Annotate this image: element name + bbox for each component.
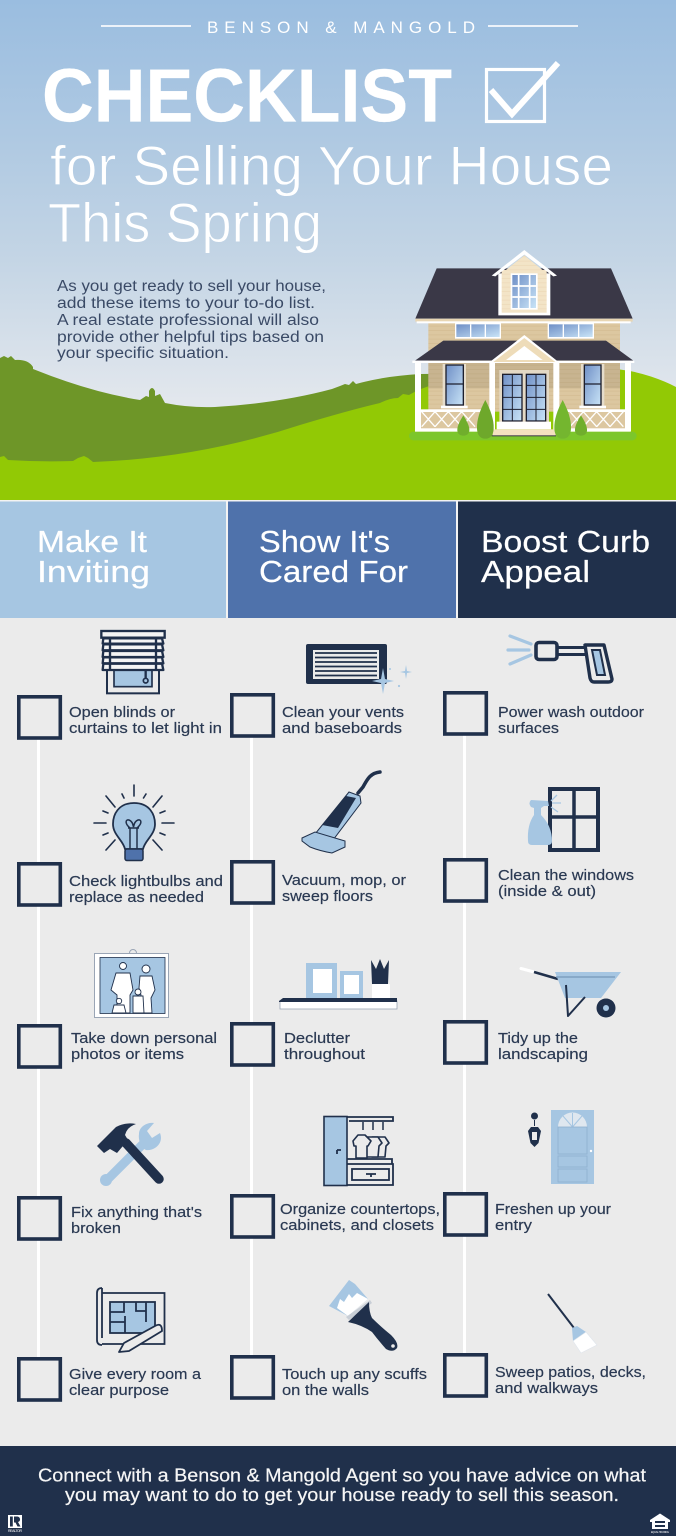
item: open blinds: Open blinds or	[69, 704, 175, 721]
heading: boost curb appeal: Boost Curb	[481, 524, 650, 559]
icon: shelf with frames	[279, 959, 397, 1009]
icon: closet	[324, 1116, 393, 1186]
item: vacuum: sweep floors	[282, 888, 373, 905]
logo line: BENSON & MANGOLD	[207, 18, 475, 37]
item: entry: entry	[495, 1217, 533, 1234]
intro paragraph: add these items to your to-do list.	[57, 295, 315, 312]
subtitle: This Spring	[48, 191, 322, 254]
item: open blinds	[19, 631, 222, 738]
icon: family photo	[94, 950, 168, 1018]
item: power wash: Power wash outdoor	[498, 704, 644, 721]
item: touch up walls: on the walls	[282, 1382, 369, 1399]
item: declutter: throughout	[284, 1046, 366, 1063]
icon: blinds	[101, 631, 165, 693]
heading: show it's cared for: Cared For	[259, 554, 408, 589]
panel: checklist body	[0, 618, 676, 1446]
item: room purpose	[19, 1288, 202, 1400]
intro paragraph: A real estate professional will also	[57, 312, 319, 329]
subtitle	[48, 134, 613, 254]
heading: show it's cared for: Show It's	[259, 524, 390, 559]
intro paragraph: your specific situation.	[57, 345, 229, 362]
subtitle: for Selling Your House	[50, 134, 613, 197]
item: organize	[232, 1116, 440, 1237]
item: landscaping: Tidy up the	[498, 1030, 578, 1047]
panel: footer	[0, 1446, 676, 1536]
item: organize: cabinets, and closets	[280, 1217, 434, 1234]
heading: make it inviting: Make It	[37, 524, 147, 559]
icon: pressure washer	[508, 636, 612, 682]
item: clean vents	[232, 644, 412, 737]
item: clean vents: Clean your vents	[282, 704, 404, 721]
item: fix broken: broken	[71, 1220, 121, 1237]
item: sweep	[445, 1294, 646, 1397]
panel: column headers	[0, 500, 676, 619]
item: personal photos: Take down personal	[71, 1030, 217, 1047]
icon: wheelbarrow	[521, 968, 621, 1018]
item: windows	[445, 789, 634, 901]
call to action: you may want to do to get your house ready to sell this season.	[65, 1485, 619, 1505]
item: lightbulbs: replace as needed	[69, 889, 204, 906]
intro paragraph	[57, 278, 326, 362]
item: vacuum	[232, 772, 406, 905]
icon: house	[409, 250, 637, 440]
hills	[0, 356, 676, 500]
item: lightbulbs	[19, 785, 223, 906]
icon: blueprint and pencil	[97, 1288, 164, 1352]
item: organize: Organize countertops,	[280, 1201, 440, 1218]
call to action: Connect with a Benson & Mangold Agent so you have advice on what	[38, 1466, 646, 1486]
item: landscaping	[445, 968, 621, 1063]
item: personal photos	[19, 950, 217, 1067]
icon: window and spray bottle	[528, 789, 598, 850]
item: entry: Freshen up your	[495, 1201, 611, 1218]
item: room purpose: Give every room a	[69, 1366, 202, 1383]
intro paragraph: provide other helpful tips based on	[57, 329, 324, 346]
title: checklist: CHECKLIST	[42, 54, 452, 138]
item: clean vents: and baseboards	[282, 720, 402, 737]
item: fix broken: Fix anything that's	[71, 1204, 202, 1221]
heading: make it inviting: Inviting	[37, 554, 150, 589]
icon: equal housing logo	[650, 1514, 670, 1534]
item: landscaping: landscaping	[498, 1046, 588, 1063]
item: fix broken	[19, 1123, 202, 1239]
heading: boost curb appeal: Appeal	[481, 554, 590, 589]
item: personal photos: photos or items	[71, 1046, 184, 1063]
item: power wash	[445, 636, 644, 737]
icon: vent	[306, 644, 412, 694]
item: touch up walls: Touch up any scuffs	[282, 1366, 427, 1383]
icon: door and lantern	[528, 1110, 594, 1184]
item: declutter	[232, 959, 397, 1065]
item: power wash: surfaces	[498, 720, 559, 737]
icon: realtor logo: REALTOR	[8, 1529, 22, 1533]
item: entry	[445, 1110, 611, 1235]
item: windows: (inside & out)	[498, 883, 596, 900]
icon: checked box	[486, 63, 558, 122]
item: lightbulbs: Check lightbulbs and	[69, 873, 223, 890]
call to action	[38, 1466, 646, 1505]
icon: realtor logo	[8, 1515, 22, 1533]
panel: header scene	[0, 0, 676, 501]
icon: equal housing logo: EQUAL HOUSING	[651, 1531, 669, 1534]
heading: make it inviting	[0, 502, 226, 618]
item: vacuum: Vacuum, mop, or	[282, 872, 406, 889]
item: sweep: Sweep patios, decks,	[495, 1364, 646, 1381]
icon: hammer and wrench	[97, 1123, 161, 1186]
icon: paint brush	[329, 1280, 397, 1351]
heading: boost curb appeal	[458, 502, 676, 618]
icon: broom	[548, 1294, 597, 1353]
icon: lightbulb	[94, 785, 174, 860]
item: sweep: and walkways	[495, 1380, 598, 1397]
icon: vacuum	[302, 772, 380, 853]
heading: show it's cared for	[228, 502, 456, 618]
item: room purpose: clear purpose	[69, 1382, 169, 1399]
item: touch up walls	[232, 1280, 427, 1399]
item: windows: Clean the windows	[498, 867, 634, 884]
item: open blinds: curtains to let light in	[69, 720, 222, 737]
item: declutter: Declutter	[284, 1030, 350, 1047]
intro paragraph: As you get ready to sell your house,	[57, 278, 326, 295]
